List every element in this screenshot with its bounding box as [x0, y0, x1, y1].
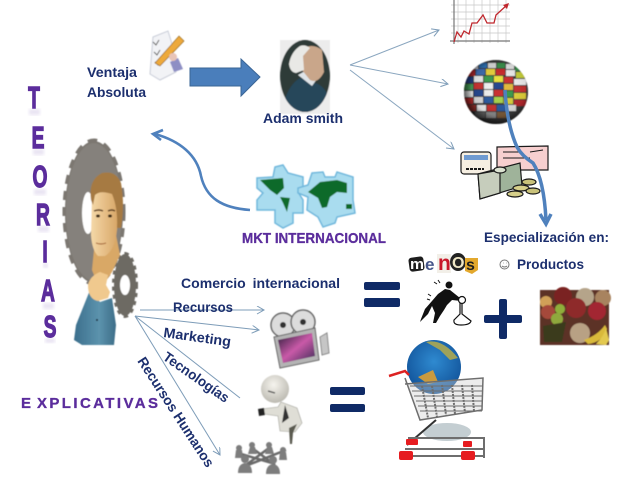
- label: Tecnologías: Tecnologías: [160, 348, 233, 406]
- arrows: man to resources: [135, 310, 264, 455]
- vertical title: TEORIAS: O: [33, 161, 47, 194]
- arrows: Adam Smith to three icons: [350, 30, 454, 149]
- label: EXPLICATIVAS: E XPLICATIVAS: [21, 395, 158, 412]
- icon: flag globe: [464, 60, 528, 124]
- label: Especialización en: Especialización en:: [484, 229, 609, 245]
- word art: menos: [408, 252, 478, 275]
- label: Recursos: Recursos: [173, 299, 233, 315]
- icon: money, cards and coins: [461, 146, 548, 199]
- vertical title: TEORIAS: R: [36, 199, 50, 232]
- icon: world puzzle: [257, 165, 355, 228]
- word art: menos: n: [438, 252, 451, 275]
- gear: small: [114, 254, 136, 316]
- equals sign: top: [364, 282, 400, 307]
- word art: menos: O: [452, 255, 464, 272]
- icon: smiley bullet: [500, 260, 509, 269]
- icon: checklist and pencil: [150, 31, 184, 80]
- label: Comercio internacional: Comercio internacional: [181, 275, 340, 291]
- word art: menos: e: [425, 255, 434, 274]
- gear: large: [65, 141, 123, 283]
- hand: [88, 272, 110, 301]
- hair: [90, 172, 123, 228]
- handle: [389, 371, 409, 376]
- arrow: puzzle to Ventaja: [153, 130, 250, 210]
- photo: food products: [540, 287, 611, 345]
- equals sign: bottom: [330, 387, 365, 412]
- cart shadow: [423, 423, 471, 441]
- vertical title: TEORIAS: [28, 82, 56, 344]
- vertical title: TEORIAS: I: [42, 236, 48, 269]
- label: Productos: Productos: [517, 256, 584, 272]
- body: [74, 290, 116, 345]
- arrow: globe to Especialización: [505, 90, 551, 224]
- icon: movie camera: [271, 310, 329, 368]
- word art: menos: m: [410, 256, 424, 273]
- globe: [407, 340, 461, 394]
- label: Adam smith: Adam smith: [263, 110, 343, 126]
- basket: [403, 378, 485, 458]
- character: thinking man with gears: [65, 141, 136, 345]
- icon: network of people: [235, 442, 287, 474]
- label: Ventaja Absoluta: [87, 64, 146, 100]
- word art: menos: s: [466, 257, 475, 274]
- portrait: Adam Smith: [280, 40, 332, 114]
- label: Marketing: Marketing: [163, 324, 232, 349]
- label: Ventaja Absoluta: Absoluta: [87, 84, 146, 100]
- label: MKT INTERNACIONAL: MKT INTERNACIONAL: [242, 230, 386, 247]
- icon: line chart: [450, 0, 510, 44]
- label: Ventaja Absoluta: Ventaja: [87, 64, 137, 80]
- wheels: [399, 439, 475, 460]
- vertical title: TEORIAS: S: [44, 311, 56, 344]
- icon: robot: [258, 375, 302, 444]
- icon: figure pushing: [420, 280, 471, 325]
- arrow: Ventaja to Adam Smith: [190, 59, 260, 96]
- plus sign: [484, 299, 522, 339]
- face: [91, 187, 118, 256]
- vertical title: TEORIAS: E: [32, 122, 44, 155]
- vertical title: TEORIAS: T: [28, 82, 40, 115]
- icon: shopping cart with globe: [389, 340, 485, 460]
- neck: [92, 235, 120, 290]
- vertical title: TEORIAS: A: [41, 275, 55, 308]
- label: Recursos Humanos: Recursos Humanos: [134, 354, 218, 470]
